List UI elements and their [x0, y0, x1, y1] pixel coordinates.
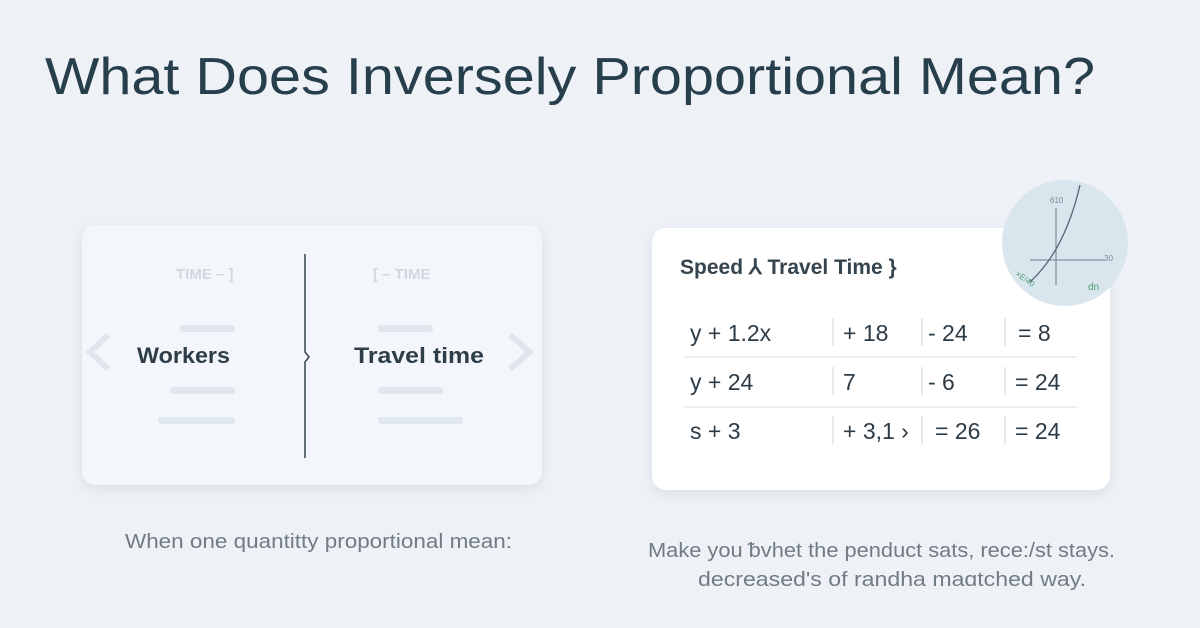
- text: travel time: Travel time: [354, 343, 484, 368]
- heading: Speed ⅄ Travel Time }: [680, 256, 897, 279]
- text: bottom right caption: decreased's of randha maɑtched way.: [698, 569, 1086, 591]
- table: + 3,1 ›: [843, 418, 909, 444]
- icon: graph circle: 30: [1104, 254, 1113, 263]
- table: y + 24: [690, 369, 754, 395]
- table: = 8: [1018, 320, 1051, 346]
- text: bottom left caption: When one quantitty proportional mean:: [125, 531, 512, 553]
- panel: speed table: [652, 228, 1110, 490]
- table: y + 1.2x: [690, 320, 772, 346]
- icon: graph circle: ×E/40: [1014, 269, 1037, 289]
- table: - 24: [928, 320, 968, 346]
- chevrons: [90, 335, 108, 369]
- label: time left: TIME – ]: [176, 266, 234, 283]
- icon: graph circle: 610: [1050, 196, 1064, 205]
- text: bottom right caption: Make you ᵬvhet the penduct sats, rece:/st stays.: [648, 540, 1115, 562]
- icon: graph circle: [1002, 180, 1128, 306]
- table: s + 3: [690, 418, 741, 444]
- title: What Does Inversely Proportional Mean?: [45, 48, 1095, 106]
- arrows left faded: [158, 325, 463, 424]
- panel: workers vs travel time: [82, 225, 542, 485]
- text: workers: Workers: [137, 343, 230, 368]
- text: bottom right caption: [648, 540, 1115, 591]
- table: [684, 318, 1077, 444]
- icon: graph circle: dn: [1088, 282, 1099, 293]
- table: = 24: [1015, 369, 1061, 395]
- divider line: [305, 254, 309, 458]
- label: time right: [ – TIME: [373, 266, 431, 283]
- table: - 6: [928, 369, 955, 395]
- table: + 18: [843, 320, 888, 346]
- table: = 24: [1015, 418, 1061, 444]
- table: = 26: [935, 418, 980, 444]
- table: 7: [843, 369, 856, 395]
